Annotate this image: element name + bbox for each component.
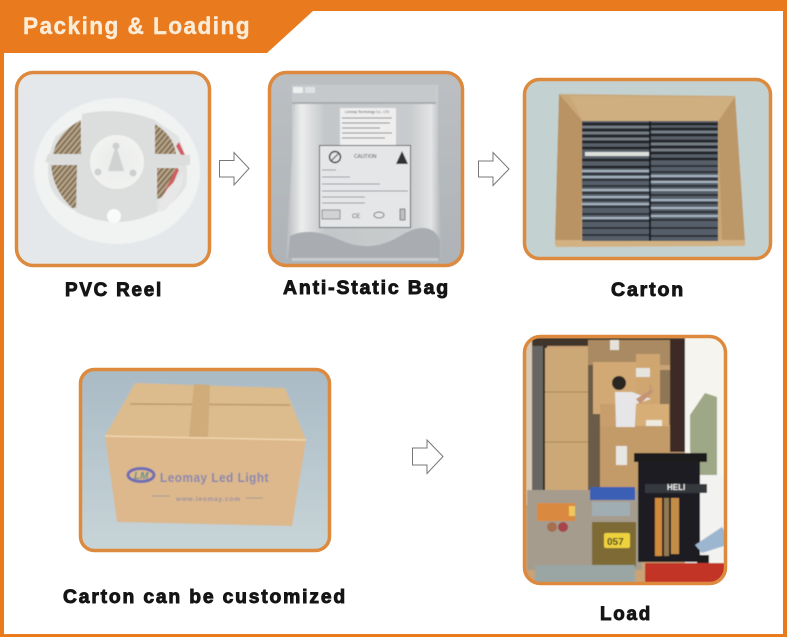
arrow 2 <box>478 152 509 186</box>
panel: PVC reel <box>15 71 211 267</box>
arrow 1 <box>220 152 249 185</box>
panel: branded carton <box>79 368 331 552</box>
panel: anti-static bag <box>268 71 464 267</box>
label: caution panel <box>320 146 410 228</box>
title: Packing & Loading <box>23 13 251 40</box>
label: product sticker: Leomay Technology Co., LTD <box>345 110 390 114</box>
label: product sticker <box>340 108 396 145</box>
label: caution panel: CAUTION <box>354 154 377 160</box>
arrow 3 <box>412 440 443 474</box>
caption: Carton: Carton <box>611 280 685 301</box>
truck rear <box>527 487 642 585</box>
icon: reel disc <box>34 98 200 244</box>
panel: carton with reels <box>523 78 772 260</box>
carton brand text: Leomay Led Light <box>160 470 269 485</box>
worker <box>612 376 653 427</box>
carton brand text <box>152 470 269 503</box>
carton brand text: www.leomay.com <box>175 496 240 503</box>
caption: Load: Load <box>600 604 652 625</box>
truck rear: 057 <box>607 537 624 548</box>
icon: LM logo: LM <box>134 471 149 482</box>
icon: LM logo <box>128 468 154 482</box>
caption: Carton can be customized: Carton can be customized <box>63 587 347 608</box>
forklift: HELI <box>667 483 685 492</box>
label: caution panel: CE <box>352 214 360 220</box>
panel: loading truck <box>523 335 727 585</box>
reel stacks <box>582 121 718 241</box>
stacked boxes <box>545 340 670 490</box>
forklift <box>634 453 727 585</box>
caption: Anti-Static Bag: Anti-Static Bag <box>283 278 450 299</box>
caption: PVC Reel: PVC Reel <box>65 280 163 301</box>
